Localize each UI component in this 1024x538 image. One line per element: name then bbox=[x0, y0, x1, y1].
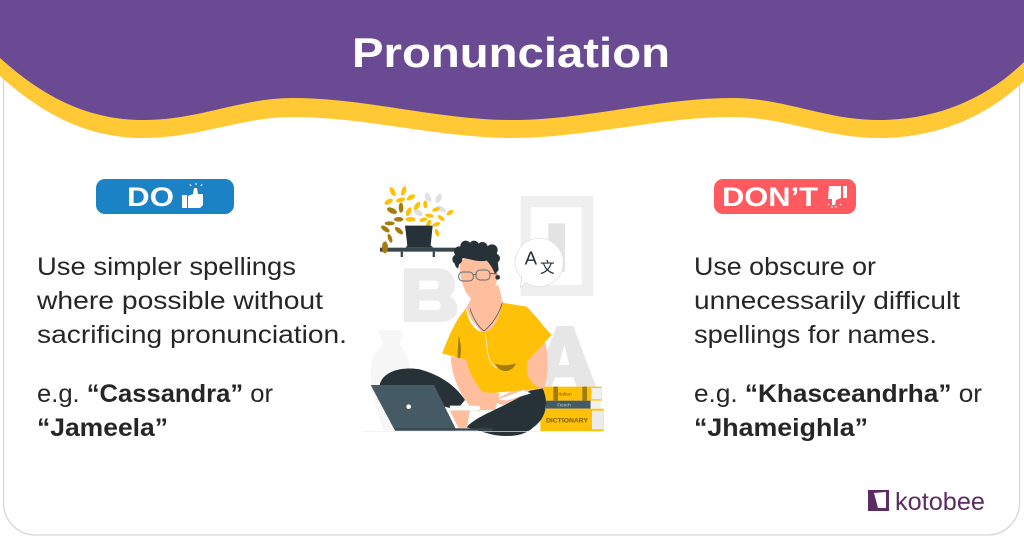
laptop bbox=[371, 385, 457, 431]
letter B bbox=[404, 268, 457, 322]
books: French bbox=[557, 402, 571, 407]
legs bbox=[380, 368, 465, 410]
icon: book bbox=[868, 490, 889, 511]
far arm bbox=[492, 342, 548, 405]
hair bbox=[452, 241, 500, 280]
illustration: person with laptop bbox=[363, 186, 604, 436]
text block: do: “Jameela” bbox=[37, 414, 168, 442]
text block: do: e.g. “Cassandra” or bbox=[37, 380, 273, 408]
text block: don't: unnecessarily difficult bbox=[694, 287, 960, 315]
open book bbox=[498, 390, 531, 401]
foot bbox=[450, 411, 470, 428]
icon: thumbs up bbox=[182, 183, 203, 208]
icon: thumbs down bbox=[828, 186, 847, 208]
title: Pronunciation bbox=[352, 29, 670, 76]
glasses bbox=[459, 270, 497, 281]
speech bubble: A bbox=[525, 248, 538, 269]
logo: kotobee: kotobee bbox=[895, 488, 985, 516]
hands on lap bbox=[475, 392, 500, 410]
shirt bbox=[442, 303, 552, 394]
DO badge: DO bbox=[127, 182, 174, 212]
speech bubble bbox=[515, 238, 563, 287]
DON'T badge bbox=[714, 179, 856, 214]
text block: don't bbox=[694, 253, 982, 442]
plant leaves bbox=[380, 186, 454, 253]
text block: don't: e.g. “Khasceandrha” or bbox=[694, 380, 982, 408]
text block: don't: “Jhameighla” bbox=[694, 414, 868, 442]
speech bubble: 文 bbox=[540, 257, 555, 278]
text block: do: sacrificing pronunciation. bbox=[37, 321, 347, 349]
books: Italian bbox=[558, 391, 572, 397]
shirt fold bbox=[495, 363, 516, 371]
text block: do: Use simpler spellings bbox=[37, 253, 296, 281]
DON'T badge: DON’T bbox=[722, 182, 819, 212]
books bbox=[540, 387, 604, 431]
plant pot bbox=[405, 226, 433, 248]
text block: do bbox=[36, 253, 347, 442]
text block: don't: spellings for names. bbox=[694, 321, 937, 349]
neck and chest bbox=[466, 285, 503, 335]
text block: do: where possible without bbox=[36, 287, 323, 315]
header wave: purple bbox=[0, 0, 1024, 120]
books: DICTIONARY bbox=[546, 419, 588, 425]
shelf bbox=[380, 248, 460, 257]
face bbox=[459, 257, 498, 302]
person bbox=[371, 241, 552, 436]
letter A bbox=[533, 326, 596, 387]
vase bbox=[371, 330, 410, 431]
DO badge bbox=[96, 179, 234, 214]
necklace and earphone cord bbox=[470, 302, 502, 331]
near arm bbox=[451, 357, 488, 412]
text block: don't: Use obscure or bbox=[694, 253, 876, 281]
header wave: yellow band bbox=[0, 0, 1024, 138]
floor line bbox=[363, 430, 603, 433]
picture frame bbox=[521, 196, 593, 296]
